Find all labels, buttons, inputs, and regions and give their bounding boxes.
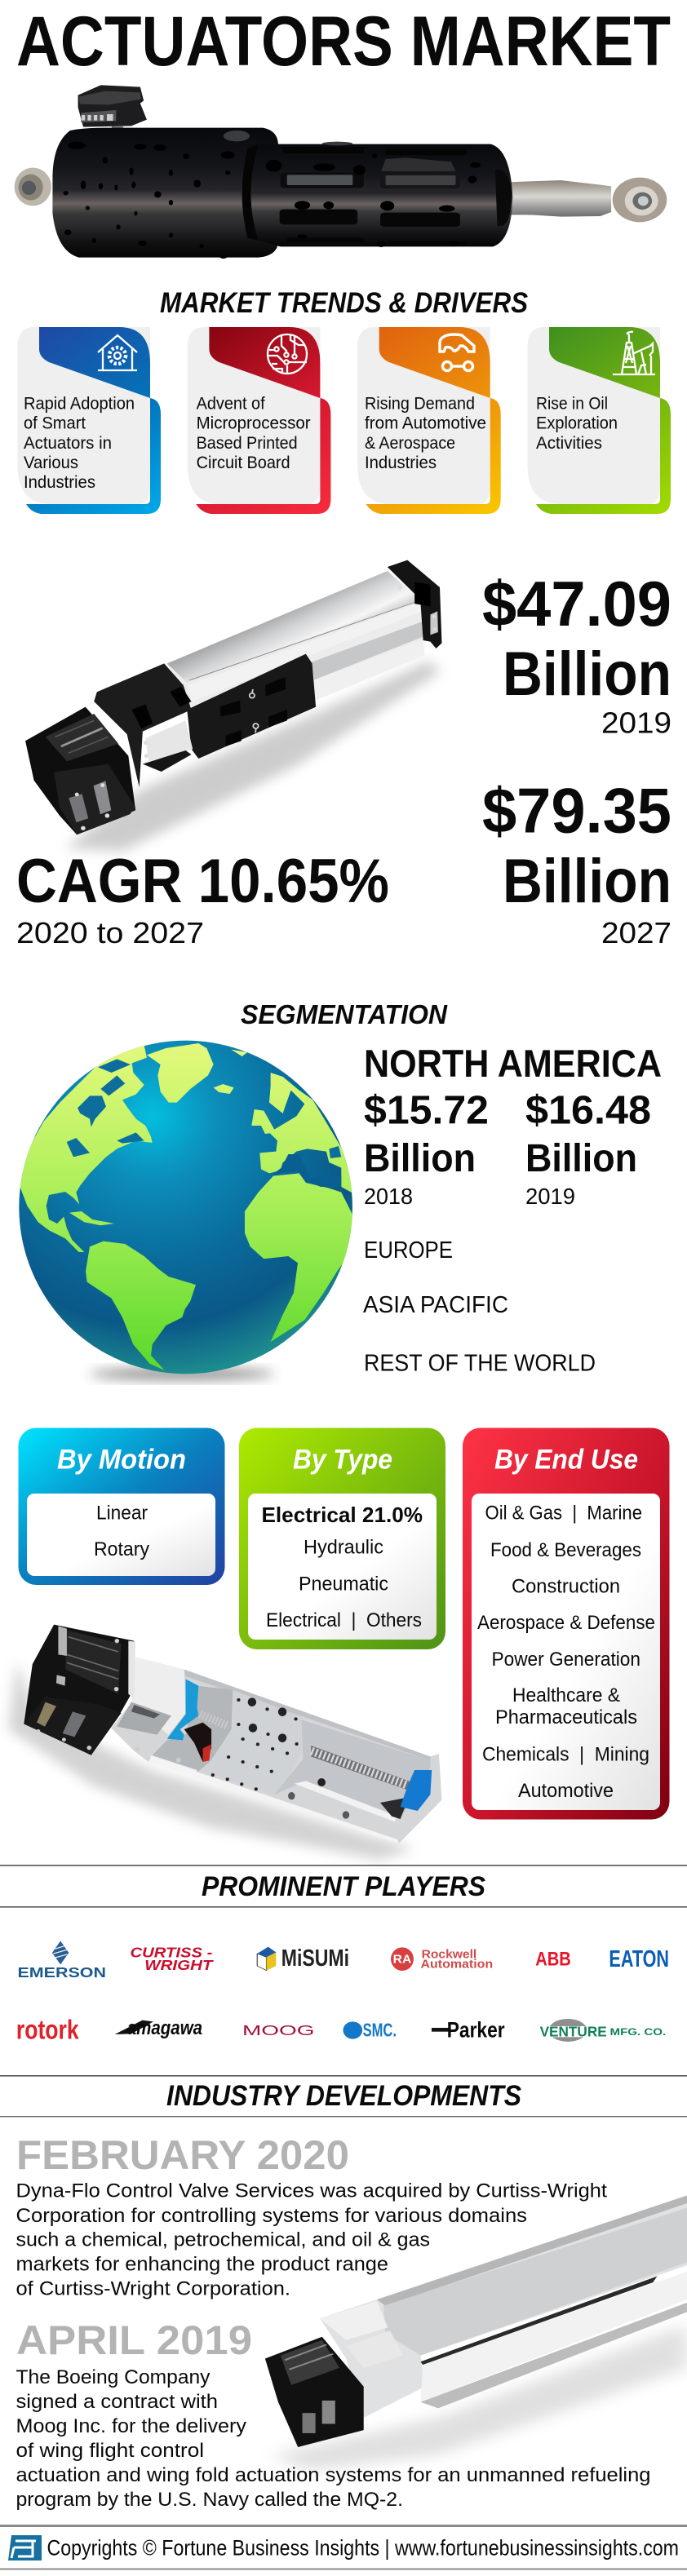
text: north america values: $15.72 bbox=[364, 1088, 489, 1132]
list: actuator types: Hydraulic bbox=[304, 1537, 383, 1558]
text: circuit board: Advent of bbox=[197, 395, 265, 413]
logo: Emerson: EMERSON bbox=[17, 1964, 106, 1981]
text: oil exploration bbox=[536, 395, 618, 453]
list: motion types bbox=[94, 1503, 149, 1560]
text: april 2019 development: actuation and wing fold actuation systems for an unmanned refueling bbox=[16, 2464, 651, 2486]
logo: ABB: ABB bbox=[535, 1947, 571, 1970]
logo: Emerson bbox=[17, 1941, 106, 1981]
text: north america values: $16.48 bbox=[525, 1088, 651, 1132]
heading: by end use: By End Use bbox=[494, 1444, 638, 1475]
list: actuator types bbox=[261, 1503, 423, 1631]
panel: trend card oil exploration bbox=[527, 327, 671, 514]
list: end uses: Food & Beverages bbox=[490, 1539, 641, 1561]
text: smart actuators: Various bbox=[24, 454, 78, 472]
logo: Rockwell Automation: Automation bbox=[421, 1958, 493, 1971]
text: february 2020 development bbox=[16, 2132, 607, 2300]
text: smart actuators bbox=[24, 395, 135, 492]
logo: Moog: MOOG bbox=[242, 2022, 315, 2038]
image: globe bbox=[19, 1041, 357, 1379]
list: end uses: Power Generation bbox=[491, 1649, 640, 1671]
text: february 2020 development: of Curtiss-Wright Corporation. bbox=[16, 2277, 290, 2300]
image: linear actuator with black carriage bbox=[25, 560, 441, 851]
heading: by type: By Type bbox=[293, 1444, 392, 1475]
logo: Curtiss-Wright: WRIGHT bbox=[144, 1957, 214, 1973]
text: circuit board: Circuit Board bbox=[197, 454, 290, 472]
text: 2027 market size: Billion bbox=[503, 847, 671, 916]
logos: company logos bbox=[16, 1941, 669, 2045]
heading: by motion: By Motion bbox=[57, 1444, 186, 1475]
logo: Rockwell Automation: RA bbox=[393, 1953, 411, 1966]
list: end uses: Chemicals | Mining bbox=[482, 1744, 649, 1765]
list: end uses: Oil & Gas | Marine bbox=[485, 1503, 642, 1524]
text: 2019 market size bbox=[482, 568, 671, 739]
image: open linear actuator with ball screw bbox=[8, 1625, 441, 1860]
text: february 2020 development: Corporation for controlling systems for various domains bbox=[16, 2205, 527, 2227]
logo: MiSUMi bbox=[257, 1945, 349, 1972]
text: CAGR bbox=[16, 847, 389, 949]
text: automotive and aerospace: Rising Demand bbox=[365, 395, 475, 413]
text: february 2020 development: markets for enhancing the product range bbox=[16, 2253, 388, 2276]
text: 2027 market size bbox=[482, 775, 671, 949]
text: oil exploration: Exploration bbox=[536, 414, 618, 432]
icon: car and axle bbox=[440, 334, 474, 370]
text: april 2019 development: of wing flight control bbox=[16, 2440, 204, 2462]
image: silver linear actuator bbox=[265, 2195, 687, 2471]
icon: house with gear bbox=[98, 335, 137, 370]
list: motion types: Rotary bbox=[94, 1538, 149, 1560]
text: automotive and aerospace: & Aerospace bbox=[365, 434, 455, 453]
logo: Curtiss-Wright bbox=[130, 1945, 214, 1973]
text: other regions: ASIA PACIFIC bbox=[363, 1292, 508, 1318]
list: end uses bbox=[477, 1503, 655, 1802]
icon: oil derrick and pumpjack bbox=[613, 332, 655, 374]
text: april 2019 development: Moog Inc. for the delivery bbox=[16, 2415, 247, 2437]
text: february 2020 development: FEBRUARY 2020 bbox=[16, 2132, 349, 2178]
text: circuit board: Microprocessor bbox=[197, 414, 311, 432]
panel: trend card smart actuators bbox=[18, 327, 161, 514]
list: end uses: Healthcare & bbox=[512, 1684, 620, 1706]
text: smart actuators: Industries bbox=[24, 473, 95, 492]
heading: segmentation: SEGMENTATION bbox=[241, 999, 448, 1029]
text: north america values: Billion bbox=[364, 1137, 476, 1180]
list: end uses: Automotive bbox=[518, 1780, 614, 1802]
text: CAGR: CAGR 10.65% bbox=[16, 847, 389, 916]
icon: circuit bbox=[268, 334, 307, 374]
text: smart actuators: of Smart bbox=[24, 414, 86, 432]
text: automotive and aerospace: Industries bbox=[365, 454, 437, 472]
list: end uses: Pharmaceuticals bbox=[495, 1706, 637, 1728]
text: 2019 market size: $47.09 bbox=[482, 568, 671, 640]
text: 2027 market size: 2027 bbox=[601, 916, 671, 949]
text: oil exploration: Rise in Oil bbox=[536, 395, 608, 413]
panel: by motion bbox=[18, 1427, 225, 1585]
logos: company logos: rotork bbox=[16, 2015, 79, 2045]
text: CAGR: 2020 to 2027 bbox=[16, 916, 204, 949]
list: actuator types: Pneumatic bbox=[299, 1573, 388, 1596]
text: circuit board: Based Printed bbox=[197, 434, 298, 453]
text: april 2019 development: APRIL 2019 bbox=[16, 2317, 252, 2363]
panel: by end use bbox=[463, 1427, 669, 1819]
list: actuator types: Electrical | Others bbox=[266, 1609, 422, 1631]
heading: market trends and drivers: MARKET TRENDS & DRIVERS bbox=[160, 287, 528, 319]
heading: prominent players: PROMINENT PLAYERS bbox=[202, 1871, 485, 1902]
panel: by type bbox=[239, 1427, 445, 1649]
text: april 2019 development: program by the U.S. Navy called the MQ-2. bbox=[16, 2489, 403, 2511]
list: motion types: Linear bbox=[96, 1503, 148, 1524]
logo: SMC bbox=[343, 2020, 397, 2041]
logos: company logos: SMC. bbox=[363, 2020, 397, 2041]
logo: Tamagawa: amagawa bbox=[127, 2016, 202, 2038]
text: 2027 market size: $79.35 bbox=[482, 775, 671, 847]
text: other regions: EUROPE bbox=[364, 1237, 453, 1264]
text: north america values bbox=[364, 1042, 662, 1209]
list: end uses: Construction bbox=[512, 1576, 620, 1597]
text: oil exploration: Activities bbox=[536, 434, 602, 453]
text: north america values: Billion bbox=[525, 1137, 637, 1180]
text: other regions: REST OF THE WORLD bbox=[364, 1351, 596, 1377]
text: february 2020 development: such a chemical, petrochemical, and oil & gas bbox=[16, 2229, 430, 2251]
list: actuator types: Electrical 21.0% bbox=[261, 1503, 423, 1527]
text: february 2020 development: Dyna-Flo Control Valve Services was acquired by Curtiss-Wright bbox=[16, 2180, 607, 2202]
text: smart actuators: Rapid Adoption bbox=[24, 395, 135, 413]
logo: Tamagawa bbox=[115, 2016, 202, 2038]
logo: Parker: Parker bbox=[447, 2017, 505, 2042]
logo: Venture Mfg: VENTURE bbox=[540, 2024, 607, 2040]
text: other regions bbox=[363, 1237, 596, 1377]
logos: company logos: MiSUMi bbox=[281, 1945, 349, 1972]
text: april 2019 development: signed a contract with bbox=[16, 2391, 218, 2413]
text: automotive and aerospace bbox=[365, 395, 486, 472]
text: north america values: NORTH AMERICA bbox=[364, 1042, 662, 1085]
text: north america values: 2018 bbox=[364, 1184, 413, 1209]
heading: industry developments: INDUSTRY DEVELOPMENTS bbox=[166, 2080, 521, 2112]
panel: trend card circuit board bbox=[188, 327, 330, 514]
panel: trend card automotive and aerospace bbox=[357, 327, 501, 514]
logo: Venture Mfg: MFG. CO. bbox=[610, 2027, 666, 2038]
image: black cylindrical actuator bbox=[15, 85, 667, 259]
text: north america values: 2019 bbox=[525, 1184, 575, 1209]
text: april 2019 development: The Boeing Company bbox=[16, 2366, 211, 2388]
text: automotive and aerospace: from Automotive bbox=[365, 414, 486, 432]
text: 2019 market size: Billion bbox=[503, 640, 671, 709]
text: smart actuators: Actuators in bbox=[24, 434, 112, 453]
logo: Rockwell Automation: Rockwell bbox=[422, 1948, 476, 1961]
logo: Curtiss-Wright: CURTISS - bbox=[130, 1945, 213, 1960]
text: 2019 market size: 2019 bbox=[601, 706, 671, 739]
logo: Venture Mfg bbox=[540, 2019, 666, 2042]
logo: Parker bbox=[432, 2017, 505, 2042]
list: end uses: Aerospace & Defense bbox=[477, 1612, 655, 1634]
icon: Fortune Business Insights logo bbox=[8, 2535, 42, 2561]
text: april 2019 development bbox=[16, 2317, 651, 2511]
footer bbox=[0, 2525, 687, 2569]
text: circuit board bbox=[197, 395, 311, 472]
logo: Rockwell Automation bbox=[391, 1947, 493, 1971]
